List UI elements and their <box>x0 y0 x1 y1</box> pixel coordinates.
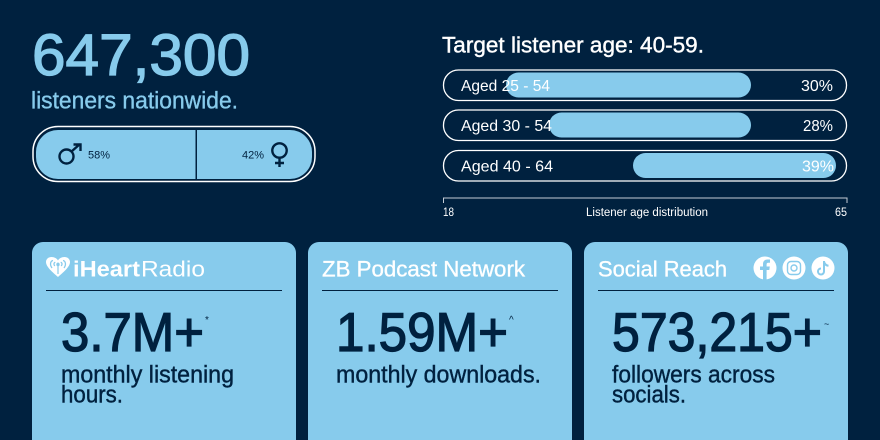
gender split pill <box>33 126 315 182</box>
card heading: ZB Podcast Network <box>322 256 526 282</box>
female percentage: 42% <box>242 150 264 162</box>
age axis: 18 <box>443 207 454 219</box>
age heading: Target listener age: 40-59. <box>442 32 704 58</box>
panel: ZB Podcast Network <box>308 242 572 440</box>
footnote mark: * <box>205 315 209 326</box>
age bar: 25 to 54: 30% <box>801 78 833 95</box>
panel: target listener age <box>442 32 847 219</box>
footnote mark: ~ <box>824 319 829 329</box>
male percentage: 58% <box>88 150 110 162</box>
stat value: 3.7M+ <box>61 301 204 363</box>
brand name: Radio <box>141 256 205 282</box>
panel: iHeartRadio <box>32 242 296 440</box>
age bar: 25 to 54 <box>444 70 846 100</box>
icon: Instagram <box>782 256 806 280</box>
age bar: 40 to 64: Aged 40 - 64 <box>461 158 553 176</box>
stat caption: socials. <box>612 382 686 408</box>
icon: female symbol <box>272 143 287 167</box>
stat caption: followers across <box>612 362 775 388</box>
age bar: 30 to 54 <box>444 110 846 140</box>
icon: iHeart logo <box>46 257 70 277</box>
panel: national listeners <box>31 23 315 182</box>
age axis <box>443 198 847 219</box>
stat caption <box>61 362 234 408</box>
stat caption: hours. <box>61 382 123 408</box>
icon: TikTok <box>812 256 834 280</box>
age bar: 25 to 54: Aged 25 - 54 <box>461 78 550 95</box>
card heading: Social Reach <box>598 256 727 282</box>
age bar: 30 to 54: Aged 30 - 54 <box>461 118 552 135</box>
headline number: 647,300 <box>32 23 250 88</box>
age axis: 65 <box>835 207 847 219</box>
stat caption <box>612 362 775 408</box>
age bar: 40 to 64 <box>444 150 846 181</box>
stat caption: monthly downloads. <box>336 362 541 388</box>
icon: male symbol <box>60 144 80 164</box>
panel: Social Reach <box>584 242 848 440</box>
icon: Facebook <box>754 256 776 280</box>
headline caption: listeners nationwide. <box>31 88 238 114</box>
brand name <box>73 256 205 282</box>
age bar: 40 to 64: 39% <box>802 158 834 176</box>
stat value: 1.59M+ <box>336 301 508 363</box>
brand name: iHeart <box>73 256 141 282</box>
stat value: 573,215+ <box>612 301 822 363</box>
age axis: Listener age distribution <box>586 207 708 219</box>
age bar: 30 to 54: 28% <box>803 118 833 135</box>
stat caption: monthly listening <box>61 362 234 388</box>
footnote mark: ^ <box>509 315 514 326</box>
